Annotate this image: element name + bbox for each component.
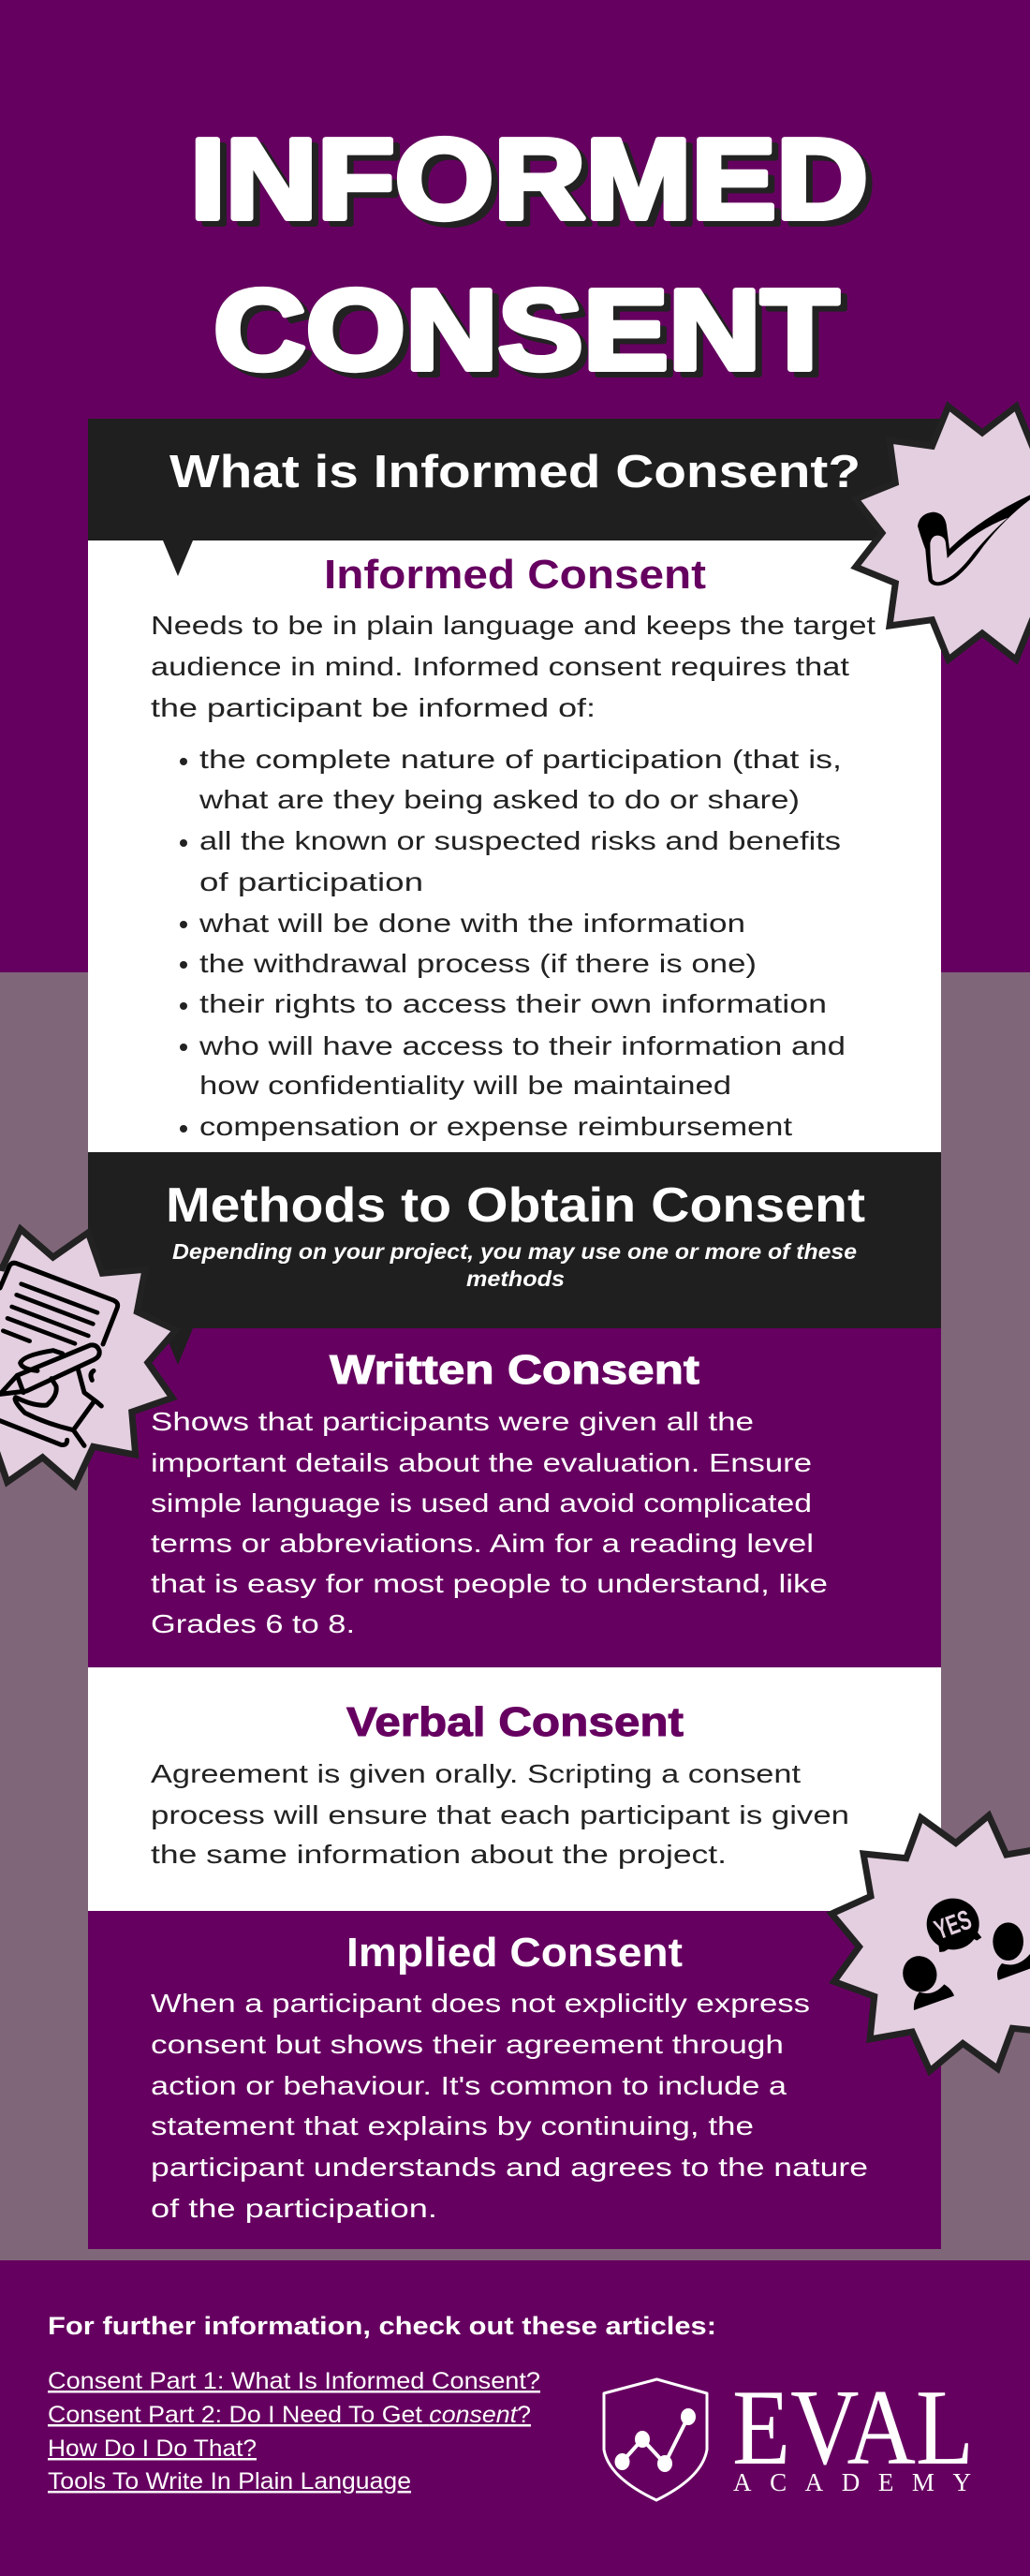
- written consent tail: [163, 1328, 193, 1365]
- panel: what is informed consent: [88, 419, 941, 1152]
- bullet list: their rights to access their own information: [199, 989, 827, 1018]
- bullet list: what are they being asked to do or share): [199, 785, 800, 814]
- verbal consent text: process will ensure that each participant is given: [151, 1800, 849, 1829]
- implied consent text: statement that explains by continuing, the: [151, 2111, 754, 2140]
- implied consent text: action or behaviour. It's common to include a: [151, 2071, 787, 2100]
- written consent text: [151, 1407, 828, 1638]
- article links: How Do I Do That?: [48, 2435, 257, 2462]
- written consent text: terms or abbreviations. Aim for a reading level: [151, 1529, 814, 1558]
- heading: what is informed consent: What is Informed Consent?: [169, 447, 861, 497]
- title: INFORMED: [190, 115, 868, 243]
- intro text: Needs to be in plain language and keeps the target: [151, 611, 876, 640]
- starburst: yes speech: [829, 1813, 1030, 2074]
- bullet list: the withdrawal process (if there is one): [199, 949, 757, 978]
- intro text: audience in mind. Informed consent requires that: [151, 652, 849, 681]
- title: CONSENT: [213, 266, 839, 393]
- bullet list: who will have access to their information and: [199, 1031, 846, 1060]
- bullet list: all the known or suspected risks and benefits: [199, 826, 841, 855]
- logo shield: [604, 2379, 707, 2500]
- heading: methods: Methods to Obtain Consent: [166, 1178, 865, 1233]
- implied consent text: [151, 1989, 868, 2223]
- article links: Consent Part 2: Do I Need To Get consent?: [48, 2402, 531, 2428]
- verbal consent text: the same information about the project.: [151, 1840, 727, 1869]
- implied consent text: of the participation.: [151, 2194, 437, 2223]
- verbal consent text: Agreement is given orally. Scripting a consent: [151, 1759, 801, 1788]
- footer heading: For further information, check out these articles:: [48, 2312, 716, 2340]
- written consent text: Shows that participants were given all the: [151, 1407, 754, 1436]
- bullet list: [180, 745, 846, 1141]
- article links: Consent Part 1: What Is Informed Consent?: [48, 2368, 540, 2394]
- icon: document and pen: [0, 1263, 118, 1445]
- icon: people saying yes: [898, 1899, 1030, 2010]
- subheading: methods note: methods: [466, 1266, 565, 1291]
- heading: verbal consent: Verbal Consent: [346, 1699, 684, 1745]
- implied consent text: When a participant does not explicitly express: [151, 1989, 810, 2018]
- panel: written consent: [88, 1328, 941, 1667]
- starburst: document signing: [0, 1224, 181, 1490]
- footer: [48, 2312, 974, 2500]
- starburst: check mark: [856, 407, 1030, 659]
- written consent text: that is easy for most people to understand, like: [151, 1569, 828, 1598]
- bullet list: of participation: [199, 867, 423, 896]
- intro text: [151, 611, 876, 722]
- title: CONSENT: [220, 272, 846, 399]
- subheading: informed consent: Informed Consent: [324, 552, 706, 598]
- bullet list: what will be done with the information: [199, 909, 745, 938]
- written consent text: Grades 6 to 8.: [151, 1609, 355, 1638]
- bullet list: the complete nature of participation (that is,: [199, 745, 842, 774]
- icon: people saying yes: YES: [931, 1904, 976, 1946]
- written consent text: important details about the evaluation. Ensure: [151, 1448, 812, 1477]
- subheading: methods note: [172, 1239, 857, 1291]
- panel: verbal consent: [88, 1667, 941, 1911]
- speech bubble tail: [163, 540, 193, 576]
- panel: methods to obtain consent header: [88, 1152, 941, 1328]
- implied consent text: consent but shows their agreement through: [151, 2030, 784, 2059]
- implied consent text: participant understands and agrees to the nature: [151, 2153, 868, 2182]
- bullet list: how confidentiality will be maintained: [199, 1071, 731, 1100]
- logo tagline: ACADEMY: [733, 2468, 971, 2496]
- panel: implied consent: [88, 1911, 941, 2249]
- article links: Tools To Write In Plain Language: [48, 2468, 411, 2495]
- heading: written consent: Written Consent: [330, 1347, 699, 1393]
- intro text: the participant be informed of:: [151, 693, 596, 722]
- title: INFORMED: [197, 121, 875, 248]
- logo wordmark: EVAL: [732, 2368, 974, 2488]
- bullet list: compensation or expense reimbursement: [199, 1112, 792, 1141]
- subheading: methods note: Depending on your project, you may use one or more of these: [172, 1239, 857, 1264]
- logo: eval academy: [604, 2368, 974, 2500]
- article links: [48, 2368, 540, 2495]
- heading: implied consent: Implied Consent: [346, 1930, 683, 1976]
- written consent text: simple language is used and avoid complicated: [151, 1488, 812, 1517]
- icon: check mark: [918, 495, 1030, 585]
- title: [190, 115, 875, 399]
- verbal consent text: [151, 1759, 849, 1869]
